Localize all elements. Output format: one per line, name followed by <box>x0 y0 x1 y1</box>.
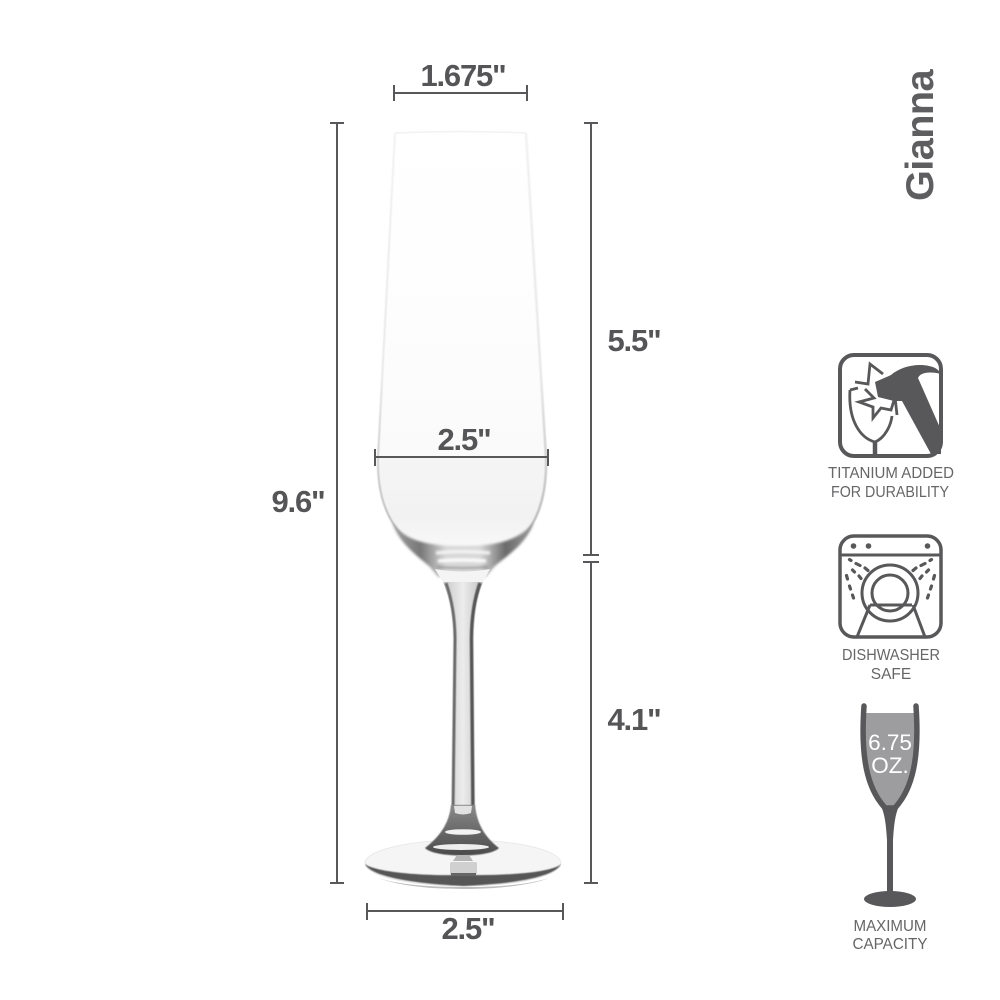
label: titanium added for durability: TITANIUM ADDED <box>828 465 954 482</box>
label: titanium added for durability: FOR DURABILITY <box>831 484 949 501</box>
dimension: base width 2.5 in: 2.5" <box>442 911 494 946</box>
dimension: stem height 4.1 in: 4.1" <box>608 702 660 737</box>
dimension: rim width 1.675 in: 1.675" <box>420 58 506 93</box>
bowl-to-stem neck <box>435 569 490 584</box>
dimension: base width 2.5 in <box>367 903 563 946</box>
label: dishwasher safe <box>842 647 940 683</box>
glass bowl lower <box>377 457 547 568</box>
dimension: bowl width 2.5 in: 2.5" <box>438 422 490 457</box>
feature: dishwasher safe <box>840 536 941 683</box>
label: maximum capacity: CAPACITY <box>852 936 928 953</box>
dimension: bowl width 2.5 in <box>375 422 548 466</box>
glass rim and side edges <box>395 132 526 133</box>
icon: flute with capacity: OZ. <box>871 753 909 778</box>
foot disc <box>365 840 561 886</box>
label: maximum capacity <box>852 918 928 953</box>
dimension: rim width 1.675 in <box>394 58 527 101</box>
glass bowl upper <box>377 132 547 457</box>
feature: maximum capacity <box>852 706 928 953</box>
product name: Gianna <box>899 69 942 201</box>
icon: hammer striking glass <box>840 355 941 456</box>
capacity value: 6.75 <box>868 730 912 755</box>
stem <box>443 582 483 812</box>
label: titanium added for durability <box>828 465 954 501</box>
label: dishwasher safe: DISHWASHER <box>842 647 940 664</box>
icon: flute with capacity <box>863 706 917 907</box>
stem flare <box>425 805 499 856</box>
foot centre reflection <box>450 862 477 875</box>
champagne flute photo <box>365 132 561 889</box>
label: maximum capacity: MAXIMUM <box>854 918 926 935</box>
dimension: total height 9.6 in: 9.6" <box>272 484 324 519</box>
icon: dishwasher <box>840 536 941 637</box>
dimension: bowl height 5.5 in: 5.5" <box>608 323 660 358</box>
dimension: total height 9.6 in <box>272 123 344 883</box>
bowl base shading <box>392 522 534 577</box>
dimension: bowl height 5.5 in <box>583 123 660 555</box>
dimension: stem height 4.1 in <box>583 562 660 883</box>
label: dishwasher safe: SAFE <box>871 666 911 683</box>
feature: titanium durability <box>828 355 954 501</box>
